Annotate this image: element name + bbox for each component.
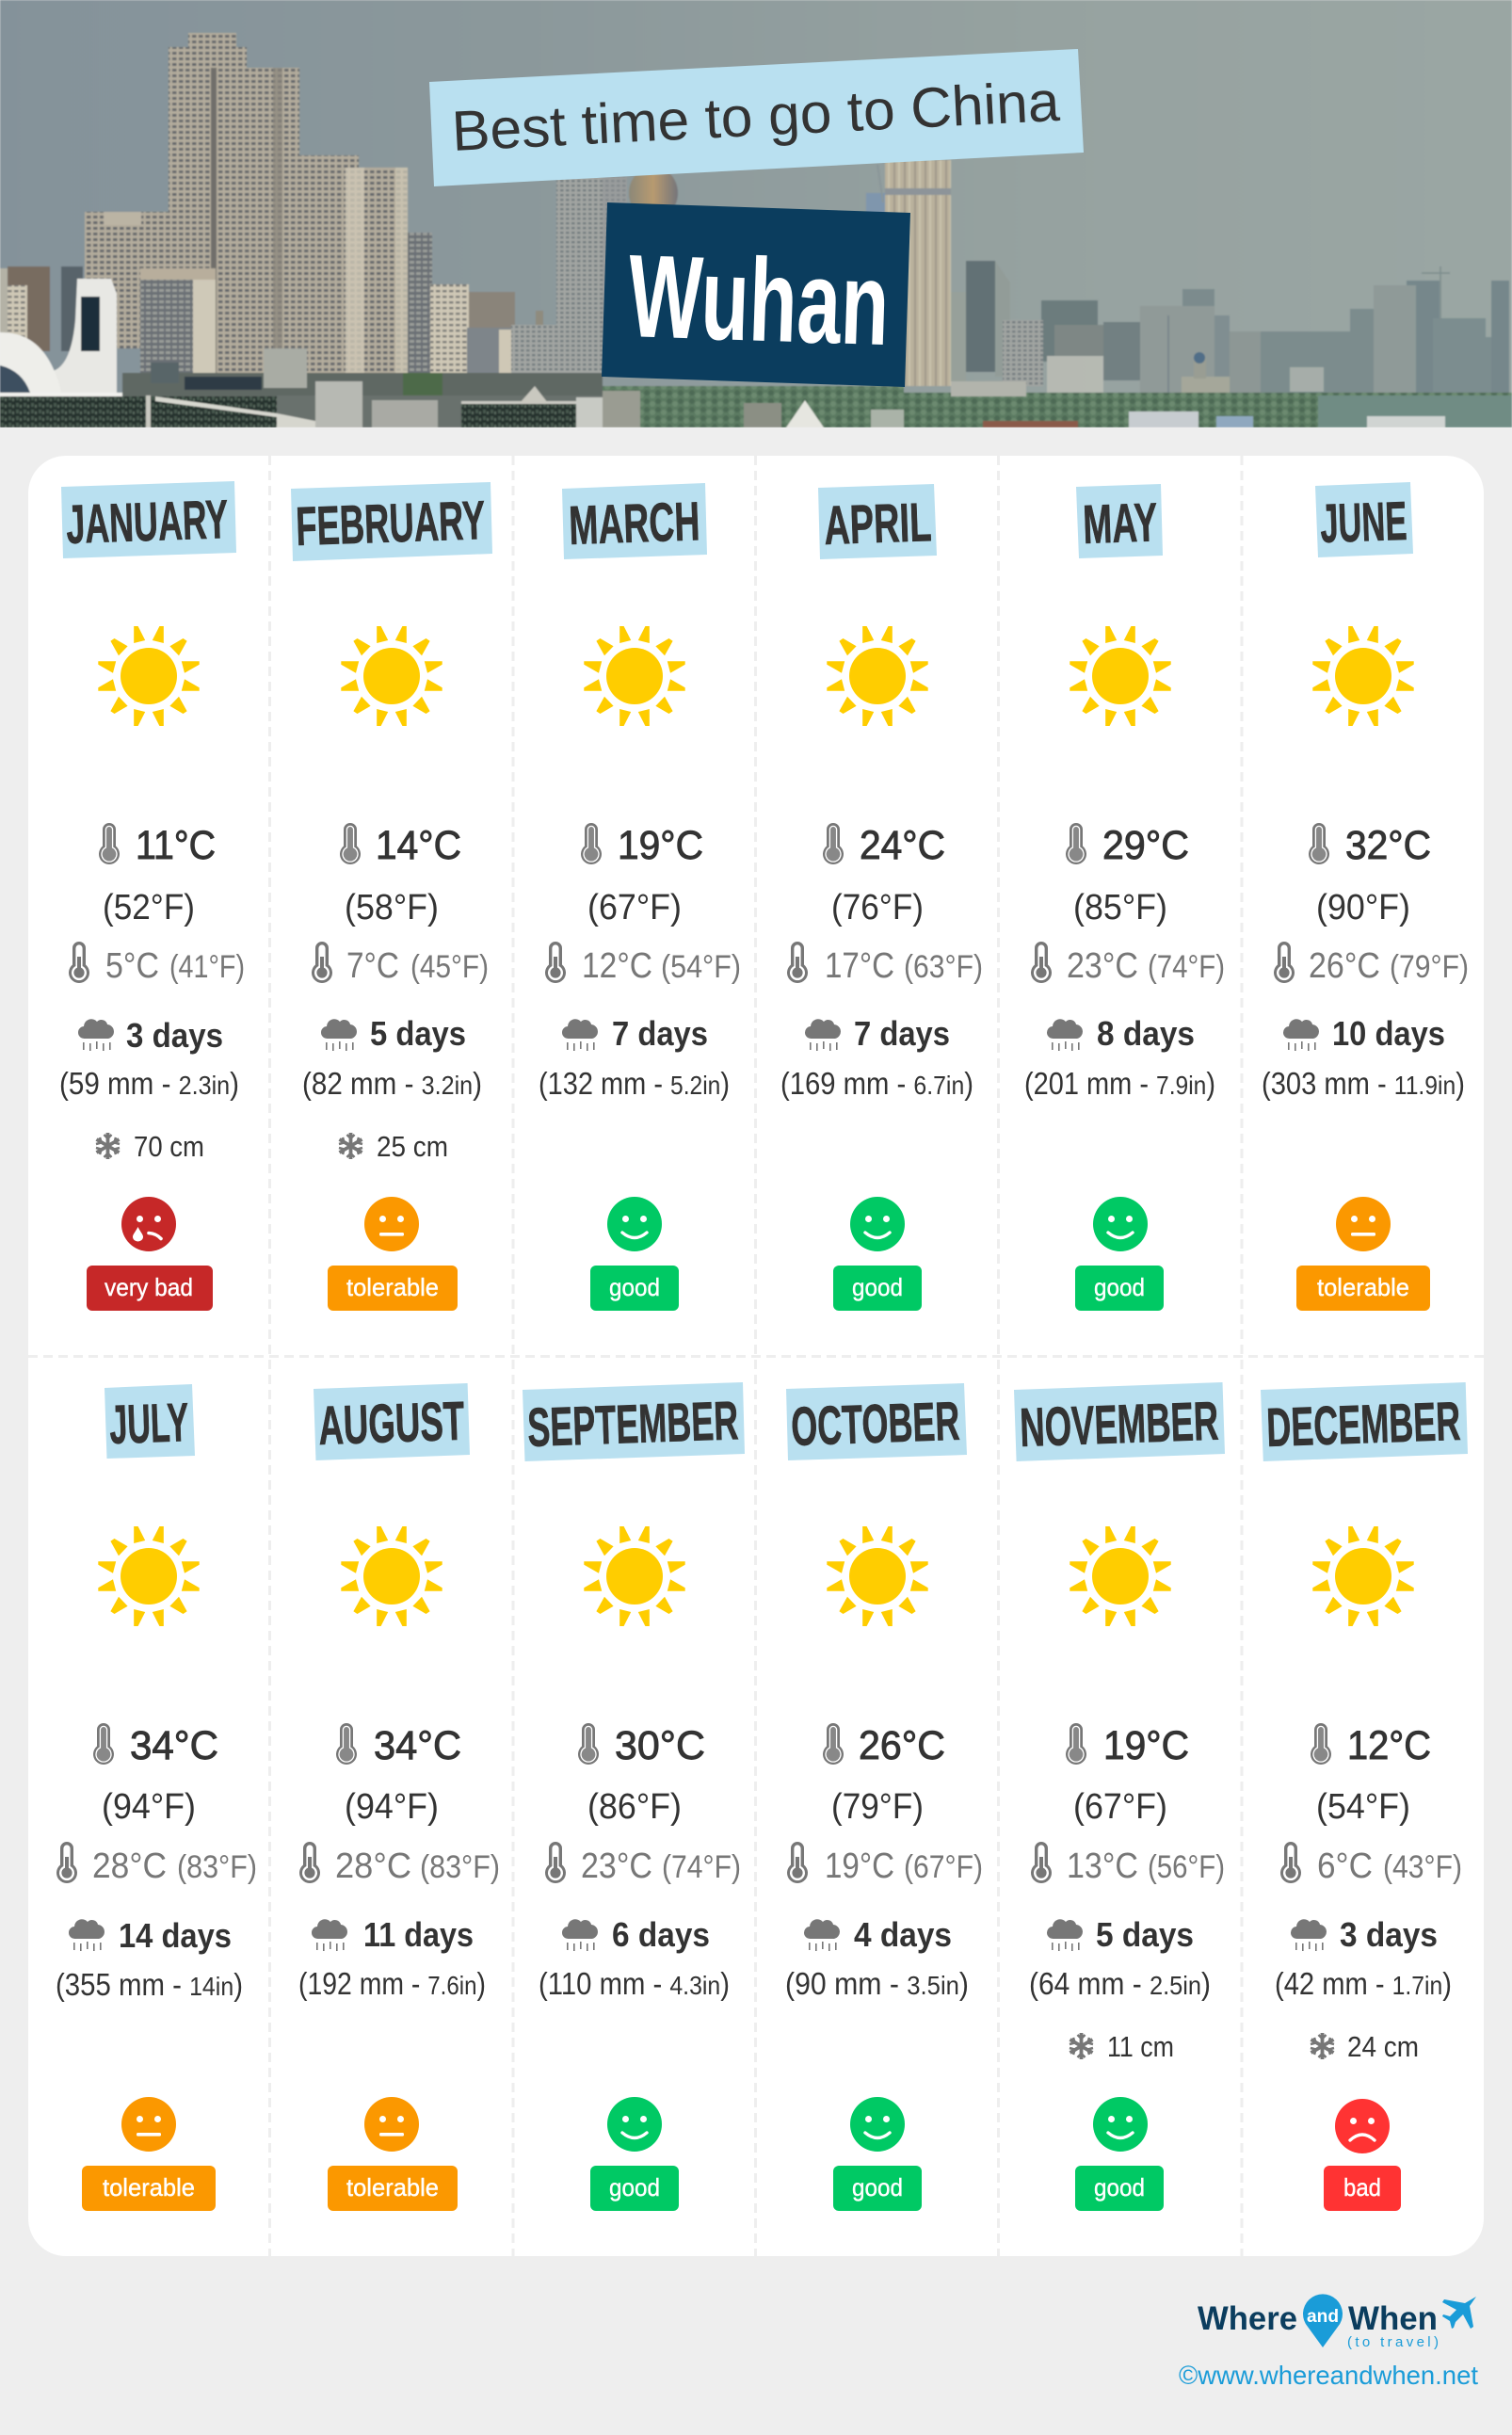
- rainfall: (110 mm - 4.3in): [539, 1966, 730, 2001]
- month: May: [1024, 484, 1225, 1311]
- high temperature: 26°C: [859, 1723, 945, 1768]
- rainfall: (82 mm - 3.2in): [302, 1066, 482, 1101]
- low temperature: [299, 1842, 500, 1886]
- city name box: [602, 202, 910, 387]
- low temperature: 23°C: [581, 1846, 652, 1886]
- rating: good: [590, 1197, 679, 1311]
- high temperature fahrenheit: (94°F): [102, 1787, 196, 1827]
- low temperature: [1031, 942, 1225, 986]
- high temperature: 32°C: [1345, 823, 1431, 868]
- rating: tolerable: [328, 2097, 458, 2211]
- rating: good: good: [609, 1273, 660, 1301]
- high temperature fahrenheit: (58°F): [345, 888, 439, 927]
- low temperature: 26°C: [1309, 946, 1380, 986]
- month label: [314, 1383, 470, 1460]
- month label: [786, 1383, 967, 1460]
- icon: sun: [1070, 626, 1171, 726]
- rainy days: [562, 1915, 710, 1954]
- month: September: [523, 1382, 745, 2211]
- month: January: [59, 481, 245, 1311]
- month label: JANUARY: [65, 489, 229, 556]
- rainfall: (355 mm - 14in): [56, 1967, 243, 2002]
- rainy days: 8 days: [1097, 1014, 1195, 1053]
- month label: MAY: [1082, 492, 1158, 556]
- high temperature: [1066, 823, 1189, 868]
- rating: good: good: [609, 2173, 660, 2201]
- rainy days: [805, 1014, 950, 1053]
- snowfall: 70 cm: [134, 1130, 204, 1163]
- low temperature: (67°F): [904, 1849, 983, 1885]
- icon: sun: [98, 1526, 200, 1626]
- high temperature: [340, 823, 461, 868]
- high temperature: 19°C: [1103, 1723, 1189, 1768]
- rainy days: 4 days: [854, 1915, 952, 1954]
- month label: NOVEMBER: [1019, 1391, 1219, 1459]
- high temperature fahrenheit: (54°F): [1316, 1787, 1410, 1827]
- icon: sun: [584, 1526, 685, 1626]
- icon: sun: [341, 626, 442, 726]
- tower D: [866, 160, 951, 386]
- month label: AUGUST: [317, 1391, 465, 1457]
- low temperature: 17°C: [825, 946, 894, 986]
- high temperature: [99, 823, 216, 868]
- month label: FEBRUARY: [295, 490, 486, 557]
- title banner: [429, 49, 1084, 186]
- low temperature: [1031, 1842, 1225, 1886]
- high temperature: [1309, 823, 1431, 868]
- month: April: [780, 484, 983, 1311]
- high temperature: [581, 823, 703, 868]
- distant towers right: [951, 261, 1509, 414]
- rating: tolerable: tolerable: [346, 2173, 439, 2201]
- month label: [1076, 484, 1163, 558]
- snowfall: [96, 1130, 204, 1163]
- icon: sun: [1070, 1526, 1171, 1626]
- month label: JUNE: [1319, 491, 1407, 555]
- low temperature: 19°C: [825, 1846, 894, 1886]
- low temperature: (54°F): [661, 949, 741, 985]
- high temperature: [1311, 1723, 1431, 1768]
- rating: good: [590, 2097, 679, 2211]
- rainfall: (90 mm - 3.5in): [785, 1966, 969, 2001]
- month label: MARCH: [568, 491, 700, 556]
- high temperature fahrenheit: (67°F): [587, 888, 682, 927]
- month label: [105, 1384, 195, 1459]
- low temperature: (83°F): [420, 1849, 500, 1885]
- rainy days: 5 days: [1096, 1915, 1194, 1954]
- low temperature: 5°C: [105, 946, 159, 986]
- high temperature: 11°C: [136, 823, 216, 868]
- rating: tolerable: [328, 1197, 458, 1311]
- logo: Where and When to travel: [1198, 2294, 1476, 2350]
- high temperature: 12°C: [1347, 1723, 1431, 1768]
- rating: bad: bad: [1343, 2173, 1381, 2201]
- globe and tower C: [629, 167, 678, 219]
- snowfall: 24 cm: [1347, 2030, 1419, 2063]
- high temperature fahrenheit: (52°F): [103, 888, 195, 927]
- header photo: Wuhan skyline: [0, 0, 1512, 427]
- low temperature: (74°F): [1148, 949, 1225, 985]
- month: October: [785, 1383, 983, 2211]
- high temperature: [336, 1723, 461, 1768]
- month label: APRIL: [823, 492, 932, 556]
- low temperature: [787, 942, 983, 986]
- snowfall: 25 cm: [377, 1130, 448, 1163]
- column and row dividers: [28, 456, 1484, 2256]
- high temperature fahrenheit: (85°F): [1073, 888, 1167, 927]
- low temperature: 23°C: [1067, 946, 1138, 986]
- month: March: [539, 483, 741, 1311]
- icon: sun: [1312, 626, 1414, 726]
- high temperature fahrenheit: (67°F): [1073, 1787, 1167, 1827]
- high temperature: [823, 1723, 945, 1768]
- icon: sun: [341, 1526, 442, 1626]
- low temperature: [312, 942, 489, 986]
- high temperature fahrenheit: (90°F): [1316, 888, 1410, 927]
- icon: airplane: [1442, 2297, 1476, 2329]
- rating: good: [1075, 1197, 1164, 1311]
- icon: sun: [584, 626, 685, 726]
- waterfront foreground: [0, 348, 1512, 427]
- rainy days: 3 days: [126, 1016, 223, 1055]
- rating: good: good: [852, 1273, 903, 1301]
- high temperature fahrenheit: (94°F): [345, 1787, 439, 1827]
- month: June: [1262, 482, 1469, 1311]
- month label: OCTOBER: [790, 1391, 960, 1458]
- rainy days: 3 days: [1340, 1915, 1438, 1954]
- panel: monthly calendar card: [28, 456, 1484, 2256]
- low temperature: (74°F): [662, 1849, 741, 1885]
- snowfall: [1070, 2030, 1174, 2063]
- rainfall: (132 mm - 5.2in): [539, 1066, 730, 1101]
- website credit: ©www.whereandwhen.net: [1179, 2361, 1478, 2390]
- high temperature: 29°C: [1102, 823, 1189, 868]
- high temperature: [1066, 1723, 1189, 1768]
- low temperature: (41°F): [169, 949, 245, 985]
- low temperature: [69, 942, 245, 986]
- month: February: [291, 482, 492, 1311]
- month label: [61, 481, 236, 558]
- logo: Where and When to travel: When: [1348, 2300, 1438, 2337]
- snowfall: 11 cm: [1107, 2030, 1174, 2063]
- rating: tolerable: [82, 2097, 216, 2211]
- rating: very bad: [87, 1197, 213, 1311]
- low temperature: 28°C: [335, 1846, 411, 1886]
- high temperature: 34°C: [374, 1723, 461, 1768]
- snowfall: [339, 1130, 448, 1163]
- rating: good: good: [852, 2173, 903, 2201]
- low temperature: [545, 1842, 741, 1886]
- rainy days: 7 days: [612, 1014, 708, 1053]
- high temperature: 14°C: [376, 823, 461, 868]
- rainy days: [562, 1014, 708, 1053]
- rainfall: (169 mm - 6.7in): [780, 1066, 973, 1101]
- rainfall: (59 mm - 2.3in): [59, 1066, 239, 1101]
- rainy days: [69, 1916, 232, 1955]
- high temperature fahrenheit: (86°F): [587, 1787, 682, 1827]
- icon: sun: [827, 626, 928, 726]
- low temperature: [56, 1842, 257, 1886]
- rating: good: [1075, 2097, 1164, 2211]
- high temperature: [93, 1723, 218, 1768]
- rainy days: 7 days: [854, 1014, 950, 1053]
- high temperature: [823, 823, 945, 868]
- high temperature: 30°C: [615, 1723, 705, 1768]
- month label: [1315, 482, 1413, 557]
- rainy days: [1291, 1915, 1438, 1954]
- month label: SEPTEMBER: [526, 1390, 739, 1459]
- icon: sun: [827, 1526, 928, 1626]
- low temperature: 12°C: [582, 946, 652, 986]
- high temperature fahrenheit: (79°F): [831, 1787, 924, 1827]
- low temperature: [1274, 942, 1469, 986]
- low temperature: (63°F): [904, 949, 983, 985]
- rainy days: [804, 1915, 952, 1954]
- logo: Where and When to travel: Where: [1198, 2300, 1297, 2337]
- rating: tolerable: [1296, 1197, 1430, 1311]
- snowfall: [1311, 2030, 1419, 2063]
- rainy days: [312, 1915, 474, 1954]
- logo: Where and When to travel: and: [1307, 2307, 1339, 2327]
- low temperature: [545, 942, 741, 986]
- rating: good: [833, 1197, 922, 1311]
- month label: [818, 484, 937, 559]
- low temperature: [787, 1842, 983, 1886]
- low temperature: (45°F): [410, 949, 489, 985]
- rainfall: (201 mm - 7.9in): [1024, 1066, 1215, 1101]
- high temperature: 19°C: [618, 823, 703, 868]
- rainy days: [1047, 1915, 1194, 1954]
- rating: tolerable: tolerable: [346, 1273, 439, 1301]
- month label: [1014, 1382, 1225, 1461]
- rainy days: [321, 1014, 466, 1053]
- icon: location pin: [1303, 2294, 1343, 2347]
- rainy days: [78, 1016, 223, 1055]
- rainy days: 6 days: [612, 1915, 710, 1954]
- month label: [291, 482, 492, 561]
- title banner: Best time to go to China: [450, 70, 1061, 163]
- rainy days: [1047, 1014, 1195, 1053]
- low temperature: 7°C: [346, 946, 399, 986]
- low temperature: 28°C: [92, 1846, 167, 1886]
- low temperature: 6°C: [1317, 1846, 1373, 1886]
- month: November: [1014, 1382, 1225, 2211]
- left towers: [0, 33, 567, 382]
- rainfall: (64 mm - 2.5in): [1029, 1966, 1211, 2001]
- low temperature: (83°F): [177, 1849, 257, 1885]
- rating: very bad: very bad: [105, 1273, 193, 1301]
- month label: [523, 1382, 745, 1461]
- low temperature: [1280, 1842, 1462, 1886]
- rating: tolerable: tolerable: [103, 2173, 195, 2201]
- rainy days: 5 days: [370, 1014, 466, 1053]
- white arch structure: [0, 279, 137, 396]
- logo: Where and When to travel: (to travel): [1347, 2334, 1439, 2350]
- month label: JULY: [108, 1392, 189, 1456]
- rainfall: (303 mm - 11.9in): [1262, 1066, 1465, 1101]
- rating: bad: [1324, 2099, 1401, 2211]
- rating: tolerable: tolerable: [1317, 1273, 1409, 1301]
- low temperature: (79°F): [1390, 949, 1469, 985]
- month: July: [56, 1384, 257, 2211]
- rating: good: good: [1094, 1273, 1145, 1301]
- rainy days: 11 days: [363, 1915, 474, 1954]
- rainy days: 10 days: [1332, 1014, 1445, 1053]
- rainy days: 14 days: [119, 1916, 232, 1955]
- high temperature fahrenheit: (76°F): [831, 888, 924, 927]
- icon: sun: [1312, 1526, 1414, 1626]
- high temperature: 24°C: [860, 823, 945, 868]
- rating: good: [833, 2097, 922, 2211]
- low temperature: (56°F): [1148, 1849, 1225, 1885]
- low temperature: 13°C: [1067, 1846, 1138, 1886]
- rainy days: [1283, 1014, 1445, 1053]
- low temperature: (43°F): [1383, 1849, 1462, 1885]
- city name box: Wuhan: [626, 231, 892, 370]
- icon: sun: [98, 626, 200, 726]
- rainfall: (42 mm - 1.7in): [1275, 1966, 1452, 2001]
- month label: [562, 483, 707, 559]
- month: August: [298, 1383, 500, 2211]
- rainfall: (192 mm - 7.6in): [298, 1966, 486, 2001]
- high temperature: 34°C: [130, 1723, 218, 1768]
- rating: good: good: [1094, 2173, 1145, 2201]
- month: December: [1261, 1382, 1468, 2211]
